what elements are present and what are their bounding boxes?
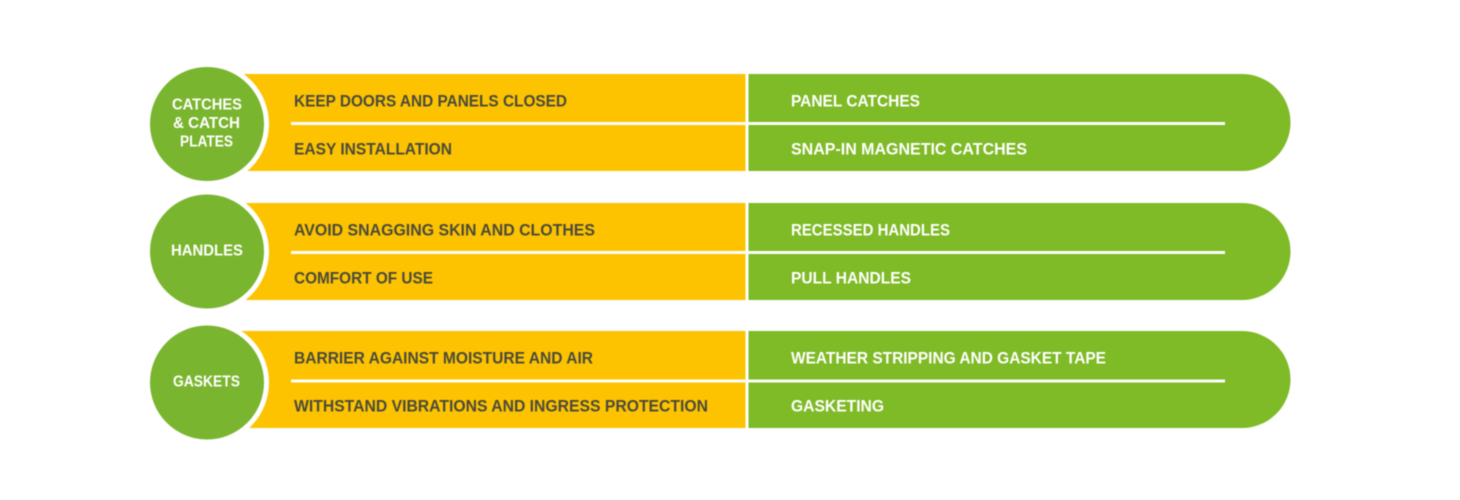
benefit text: BARRIER AGAINST MOISTURE AND AIR [294, 348, 593, 368]
badge label: PLATES [180, 134, 233, 150]
benefit text: EASY INSTALLATION [294, 140, 452, 158]
product text: WEATHER STRIPPING AND GASKET TAPE [791, 348, 1106, 368]
green panel [748, 74, 1290, 171]
product text: PULL HANDLES [791, 268, 911, 288]
divider [291, 380, 1225, 382]
row: handles [148, 192, 1290, 311]
circle badge [148, 192, 266, 311]
row: gaskets [148, 323, 1290, 442]
badge label [172, 96, 242, 150]
product text: RECESSED HANDLES [791, 220, 950, 240]
amber panel [240, 331, 746, 428]
circle badge [148, 323, 266, 442]
product text: GASKETING [791, 396, 884, 416]
product text: SNAP-IN MAGNETIC CATCHES [791, 140, 1027, 158]
amber panel [240, 74, 746, 171]
green panel [748, 203, 1290, 300]
benefit text: KEEP DOORS AND PANELS CLOSED [294, 92, 567, 110]
badge label: & CATCH [173, 115, 240, 132]
amber panel [240, 203, 746, 300]
badge label: GASKETS [173, 374, 240, 390]
badge label: HANDLES [171, 242, 243, 260]
badge label: CATCHES [172, 96, 242, 114]
benefit text: AVOID SNAGGING SKIN AND CLOTHES [294, 220, 595, 240]
product text: PANEL CATCHES [791, 92, 920, 110]
divider [291, 251, 1225, 254]
benefit text: WITHSTAND VIBRATIONS AND INGRESS PROTECTION [294, 396, 708, 416]
benefit text: COMFORT OF USE [294, 268, 433, 288]
green panel [748, 331, 1290, 428]
row: catches and catch plates [148, 64, 1290, 184]
circle badge [148, 64, 266, 184]
divider [291, 122, 1225, 125]
